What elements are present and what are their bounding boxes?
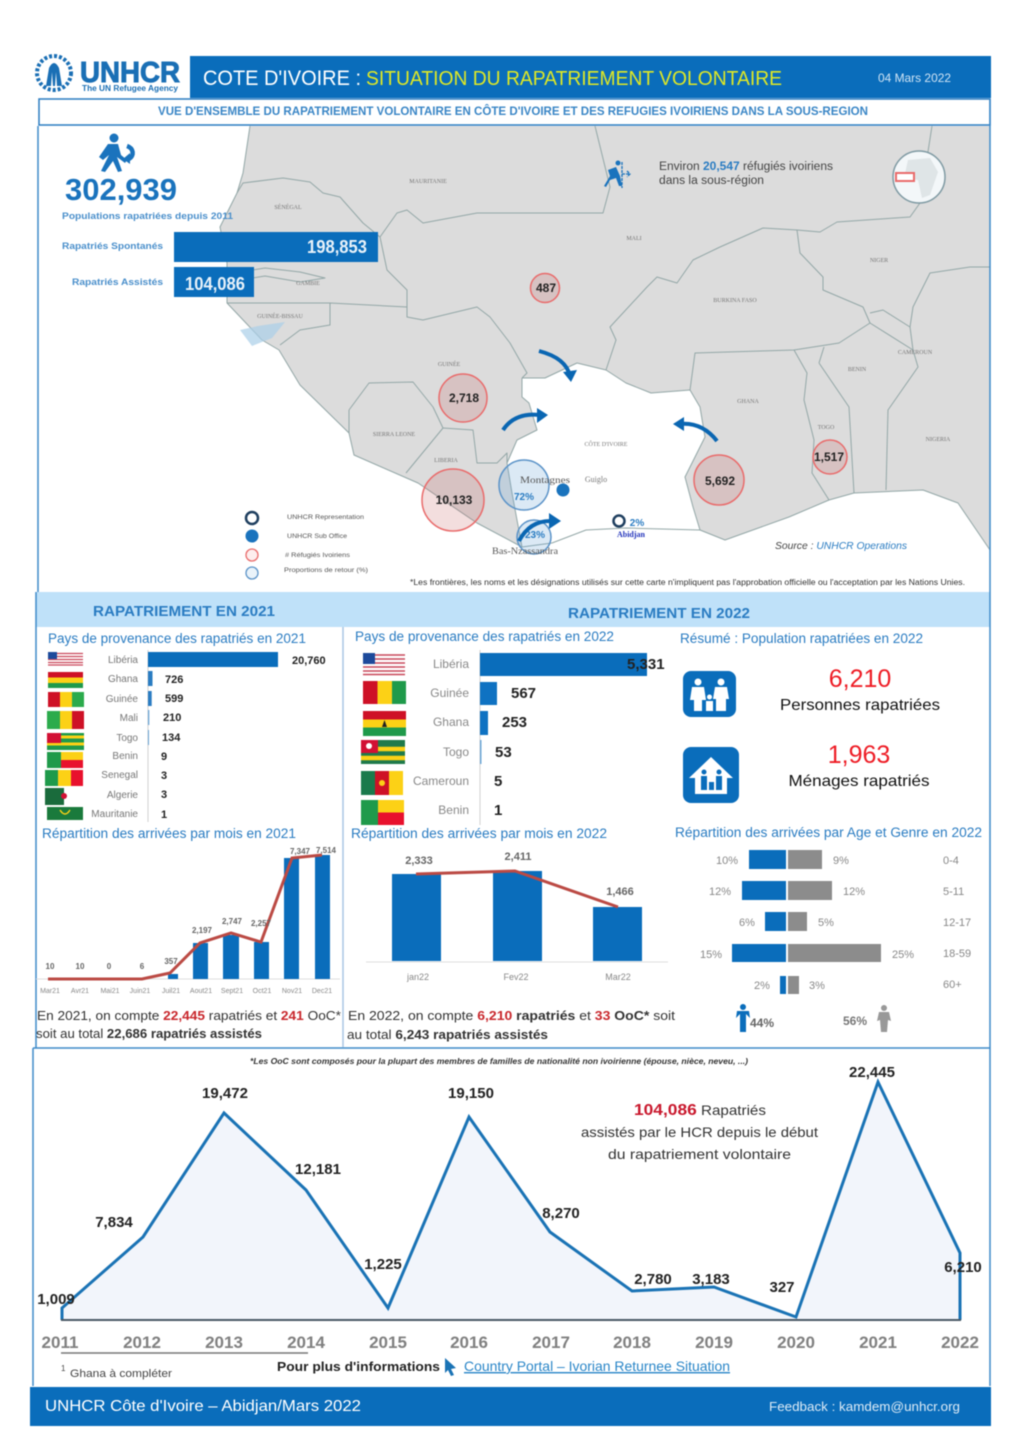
- UNHCR logo: UNHCR: [80, 57, 180, 89]
- map disclaimer: *Les frontières, les noms et les désignations utilisés sur cette carte n'impliquent pas l'approbation officielle ou l'acceptation par les Nations Unies.: [410, 578, 965, 587]
- borders: [220, 126, 990, 550]
- value labels: 19,472: [202, 1085, 248, 1102]
- persons returned: Personnes rapatriées: [780, 697, 940, 714]
- source: Source : UNHCR Operations: [775, 541, 907, 552]
- value labels: 6,210: [944, 1259, 982, 1276]
- values: 3: [161, 789, 167, 801]
- 2022 summary text: [347, 1008, 675, 1042]
- year labels: 2011: [42, 1333, 78, 1352]
- pyramid bars: 12-17: [943, 917, 971, 929]
- bar and line chart: Juil21: [162, 988, 180, 995]
- value labels: [37, 1064, 982, 1308]
- refugee circles: [422, 274, 847, 531]
- bar and line chart: 7,514: [316, 846, 337, 855]
- map labels: SÉNÉGAL: [274, 203, 302, 211]
- values: 134: [162, 732, 181, 744]
- bar and line chart: 2,257: [251, 919, 272, 928]
- bar and line chart: Mar21: [40, 988, 60, 995]
- bar and line chart: Nov21: [282, 988, 302, 995]
- pyramid bars: 10%: [716, 855, 738, 867]
- pyramid bars: 15%: [700, 949, 722, 961]
- bar and line chart: [366, 851, 668, 982]
- footnote: Ghana: 1: [61, 1364, 66, 1373]
- pyramid bars: [700, 850, 971, 994]
- title banner: SITUATION DU RAPATRIEMENT VOLONTAIRE: [366, 68, 782, 90]
- year labels: 2012: [123, 1333, 161, 1352]
- map labels: GHANA: [737, 399, 759, 405]
- icon: household: [683, 747, 739, 803]
- year labels: 2017: [532, 1333, 570, 1352]
- assisted returnees bar: Rapatriés Assistés: [72, 277, 163, 288]
- total returnees: 302,939: [65, 172, 177, 207]
- return proportion circles: [492, 460, 646, 556]
- return proportion circles: Montagnes: [520, 475, 571, 485]
- values: 567: [511, 685, 536, 702]
- pyramid bars: 2%: [754, 980, 770, 992]
- values: 1: [494, 802, 502, 819]
- return proportion circles: 72%: [514, 492, 534, 503]
- return proportion circles: Bas-Nzassandra: [492, 546, 558, 556]
- bar and line chart: 0: [107, 962, 112, 971]
- panel: top left key figures: [62, 134, 378, 297]
- pyramid bars: 12%: [709, 886, 731, 898]
- values: 599: [165, 693, 183, 705]
- map labels: MAURITANIE: [409, 179, 447, 185]
- country labels: Ghana: [433, 715, 469, 729]
- country labels: Togo: [443, 745, 469, 759]
- flags: [45, 652, 84, 820]
- households returned: 1,963: [828, 741, 890, 769]
- return proportion circles: Abidjan: [617, 530, 646, 539]
- 2021 summary text: En 2021, on compte 22,445 rapatriés et 241 OoC*: [37, 1008, 341, 1023]
- more information link: Country Portal – Ivorian Returnee Situation: [464, 1358, 730, 1374]
- title banner: 04 Mars 2022: [878, 71, 951, 85]
- return proportion circles: 23%: [525, 530, 545, 541]
- map labels: NIGER: [870, 258, 888, 264]
- values: 210: [163, 712, 181, 724]
- country labels: Libéria: [433, 657, 469, 671]
- year labels: 2014: [287, 1333, 325, 1352]
- gender split: 56%: [843, 1014, 867, 1028]
- year labels: 2020: [777, 1333, 815, 1352]
- bar and line chart: Mar22: [605, 972, 631, 982]
- pyramid bars: 60+: [943, 979, 962, 991]
- value labels: 7,834: [95, 1214, 133, 1231]
- values: 726: [165, 674, 183, 686]
- title banner: COTE D'IVOIRE :: [203, 67, 361, 90]
- map labels: CAMEROUN: [898, 350, 933, 356]
- bar and line chart: 6: [140, 962, 145, 971]
- pyramid bars: 6%: [739, 917, 755, 929]
- horizontal bars: [148, 650, 278, 822]
- year labels: [42, 1333, 979, 1352]
- title banner: [190, 56, 991, 98]
- refugee count text: dans la sous-région: [659, 175, 764, 187]
- bar and line chart: 2,747: [222, 917, 243, 926]
- bar and line chart: 2,197: [192, 926, 213, 935]
- OoC footnote: *Les OoC sont composés pour la plupart des membres de familles de nationalité non ivoirienne (épouse, nièce, neveu, ...): [250, 1057, 748, 1066]
- footnote: Ghana: Ghana à compléter: [70, 1368, 172, 1380]
- panel: origin 2021: [45, 631, 326, 822]
- more information link: [277, 1358, 730, 1376]
- map labels: GUINÉE-BISSAU: [257, 312, 303, 320]
- persons returned: [780, 665, 940, 714]
- gender split: [736, 1004, 891, 1032]
- subtitle bar: VUE D'ENSEMBLE DU RAPATRIEMENT VOLONTAIRE EN CÔTE D'IVOIRE ET DES REFUGIES IVOIRIENS DANS LA SOUS-REGION: [158, 103, 868, 118]
- assisted returnees bar: 104,086: [185, 274, 245, 294]
- return proportion circles: 2%: [630, 518, 644, 529]
- assisted returnees bar: [72, 267, 254, 297]
- country labels: Senegal: [101, 770, 138, 781]
- 2021 summary text: soit au total 22,686 rapatriés assistés: [36, 1026, 262, 1041]
- refugee circles: 10,133: [436, 493, 473, 507]
- map labels: SIERRA LEONE: [373, 432, 415, 438]
- footer: UNHCR Côte d'Ivoire – Abidjan/Mars 2022: [45, 1398, 361, 1415]
- panel: annual returns area chart: [37, 1064, 982, 1353]
- refugee circles: 5,692: [705, 474, 735, 488]
- legend: # Réfugiés Ivoiriens: [285, 553, 350, 559]
- panel: origin 2022: [355, 629, 665, 825]
- year labels: 2018: [613, 1333, 651, 1352]
- map labels: CÔTE D'IVOIRE: [585, 440, 628, 448]
- refugee circles: 487: [536, 281, 556, 295]
- year labels: 2019: [695, 1333, 733, 1352]
- 2021 summary text: [36, 1008, 341, 1041]
- callout: assisted total: assistés par le HCR depuis le début: [581, 1124, 818, 1140]
- pyramid bars: 0-4: [943, 855, 959, 867]
- map labels: TOGO: [818, 425, 835, 431]
- flow arrows: [503, 351, 717, 541]
- values: 53: [495, 744, 512, 761]
- return proportion circles: Guiglo: [585, 475, 607, 484]
- households returned: Ménages rapatriés: [788, 773, 930, 790]
- footnote: Ghana: [61, 1364, 172, 1380]
- country labels: Cameroun: [413, 774, 469, 788]
- pyramid bars: 25%: [892, 949, 914, 961]
- values: [161, 655, 326, 821]
- values: 9: [161, 751, 167, 763]
- bar and line chart: Avr21: [71, 988, 89, 995]
- country labels: Benin: [438, 803, 469, 817]
- area and line: [61, 1082, 961, 1320]
- value labels: 19,150: [448, 1085, 494, 1102]
- bar and line chart: 7,347: [290, 847, 311, 856]
- values: 5,331: [627, 656, 665, 673]
- section band: 2021 and 2022 headings: RAPATRIEMENT EN 2021: [93, 603, 275, 620]
- panel: age and gender pyramid: [675, 825, 982, 1032]
- country labels: Togo: [116, 733, 138, 744]
- ocean: [39, 126, 990, 592]
- country labels: [413, 657, 469, 817]
- legend: UNHCR Sub Office: [287, 534, 348, 540]
- value labels: 3,183: [692, 1271, 730, 1288]
- map labels: MALI: [626, 236, 642, 242]
- bar and line chart: Dec21: [312, 988, 332, 995]
- country labels: Mauritanie: [91, 809, 138, 820]
- subtitle bar: [39, 99, 990, 125]
- bar and line chart: 357: [164, 957, 178, 966]
- Côte d'Ivoire: [507, 363, 705, 547]
- 2022 summary text: au total 6,243 rapatriés assistés: [347, 1027, 548, 1042]
- total caption: Populations rapatriées depuis 2011: [62, 211, 234, 222]
- refugee circles: 1,517: [814, 450, 844, 464]
- spontaneous returnees bar: [62, 232, 378, 262]
- icon: fleeing refugee: [604, 160, 630, 188]
- gender split: 44%: [750, 1016, 774, 1030]
- panel: monthly 2022: [347, 826, 675, 1042]
- footer: [30, 1387, 991, 1426]
- UNHCR logo: The UN Refugee Agency: [82, 84, 179, 93]
- year labels: 2013: [205, 1333, 243, 1352]
- pyramid bars: 3%: [809, 980, 825, 992]
- values: 3: [161, 770, 167, 782]
- value labels: 1,225: [364, 1256, 402, 1273]
- map labels: GAMBIE: [296, 281, 320, 287]
- country labels: Libéria: [108, 655, 138, 666]
- section band: 2021 and 2022 headings: [36, 592, 990, 627]
- 2022 summary text: En 2022, on compte 6,210 rapatriés et 33 OoC* soit: [348, 1008, 675, 1023]
- more information link: Pour plus d'informations: [277, 1359, 440, 1374]
- value labels: 22,445: [849, 1064, 895, 1081]
- map labels: BENIN: [848, 367, 867, 373]
- refugee circles: 2,718: [449, 391, 479, 405]
- values: 253: [502, 714, 527, 731]
- country labels: Ghana: [108, 674, 138, 685]
- heading: Pays de provenance des rapatriés en 2021: [48, 631, 306, 646]
- bar and line chart: Sept21: [221, 988, 243, 995]
- spontaneous returnees bar: Rapatriés Spontanés: [62, 241, 163, 252]
- values: [494, 656, 665, 819]
- pyramid bars: 5-11: [943, 886, 964, 898]
- value labels: 8,270: [542, 1205, 580, 1222]
- pyramid bars: 12%: [843, 886, 865, 898]
- country labels: Algerie: [107, 790, 138, 801]
- footer: Feedback : kamdem@unhcr.org: [769, 1399, 960, 1414]
- spontaneous returnees bar: 198,853: [307, 237, 367, 257]
- map labels: [257, 179, 951, 464]
- map labels: GUINÉE: [438, 360, 460, 368]
- map labels: NIGERIA: [926, 437, 951, 443]
- bar and line chart: 2,411: [505, 851, 531, 863]
- horizontal bars: [480, 650, 647, 825]
- values: 5: [494, 773, 502, 790]
- year labels: 2021: [859, 1333, 897, 1352]
- bar and line chart: 10: [76, 962, 85, 971]
- icon: family: [683, 671, 736, 717]
- map labels: BURKINA FASO: [713, 298, 757, 304]
- country labels: Guinée: [430, 686, 469, 700]
- callout: assisted total: [581, 1102, 818, 1162]
- panel: map: [39, 126, 990, 592]
- pyramid bars: 18-59: [943, 948, 971, 960]
- year labels: 2022: [941, 1333, 979, 1352]
- bar and line chart: Oct21: [253, 988, 271, 995]
- icon: returnee: [99, 134, 133, 172]
- bar and line chart: Juin21: [130, 988, 150, 995]
- inset globe: [893, 151, 945, 203]
- year labels: 2015: [369, 1333, 407, 1352]
- heading: Répartition des arrivées par mois en 2021: [42, 826, 296, 841]
- bar and line chart: 10: [46, 962, 55, 971]
- value labels: 2,780: [634, 1271, 672, 1288]
- legend: [246, 512, 368, 579]
- map labels: LIBERIA: [434, 458, 458, 464]
- panel: monthly 2021: [36, 826, 341, 1041]
- callout: assisted total: du rapatriement volontaire: [608, 1146, 791, 1162]
- flags: [361, 653, 406, 825]
- bar and line chart: jan22: [406, 972, 429, 982]
- bar and line chart: 2,333: [405, 855, 433, 867]
- refugee count text: [659, 161, 833, 187]
- legend: UNHCR Representation: [287, 515, 364, 521]
- bar and line chart: Mai21: [100, 988, 120, 995]
- country labels: [91, 655, 138, 820]
- callout: assisted total: 104,086 Rapatriés: [634, 1102, 766, 1119]
- legend: Proportions de retour (%): [284, 568, 368, 574]
- pyramid bars: 9%: [833, 855, 849, 867]
- section band: 2021 and 2022 headings: RAPATRIEMENT EN 2022: [568, 605, 750, 622]
- values: 1: [161, 809, 167, 821]
- panel: summary 2022: [680, 631, 940, 803]
- refugee count text: Environ 20,547 réfugiés ivoiriens: [659, 161, 833, 173]
- country labels: Mali: [120, 713, 138, 724]
- heading: Répartition des arrivées par Age et Genre en 2022: [675, 825, 982, 840]
- UNHCR logo: [37, 56, 180, 93]
- persons returned: 6,210: [829, 665, 891, 693]
- country labels: Guinée: [106, 694, 138, 705]
- bar and line chart: [36, 846, 340, 995]
- pyramid bars: 5%: [818, 917, 834, 929]
- bar and line chart: Fev22: [503, 972, 529, 982]
- bar and line chart: Aout21: [190, 988, 212, 995]
- values: 20,760: [292, 655, 326, 667]
- value labels: 327: [769, 1279, 795, 1296]
- value labels: 12,181: [295, 1161, 341, 1178]
- value labels: 1,009: [37, 1291, 75, 1308]
- households returned: [788, 741, 930, 790]
- heading: Résumé : Population rapatriées en 2022: [680, 631, 923, 646]
- heading: Répartition des arrivées par mois en 2022: [351, 826, 607, 841]
- bar and line chart: 1,466: [606, 886, 634, 898]
- heading: Pays de provenance des rapatriés en 2022: [355, 629, 614, 644]
- year labels: 2016: [450, 1333, 488, 1352]
- country labels: Benin: [112, 751, 138, 762]
